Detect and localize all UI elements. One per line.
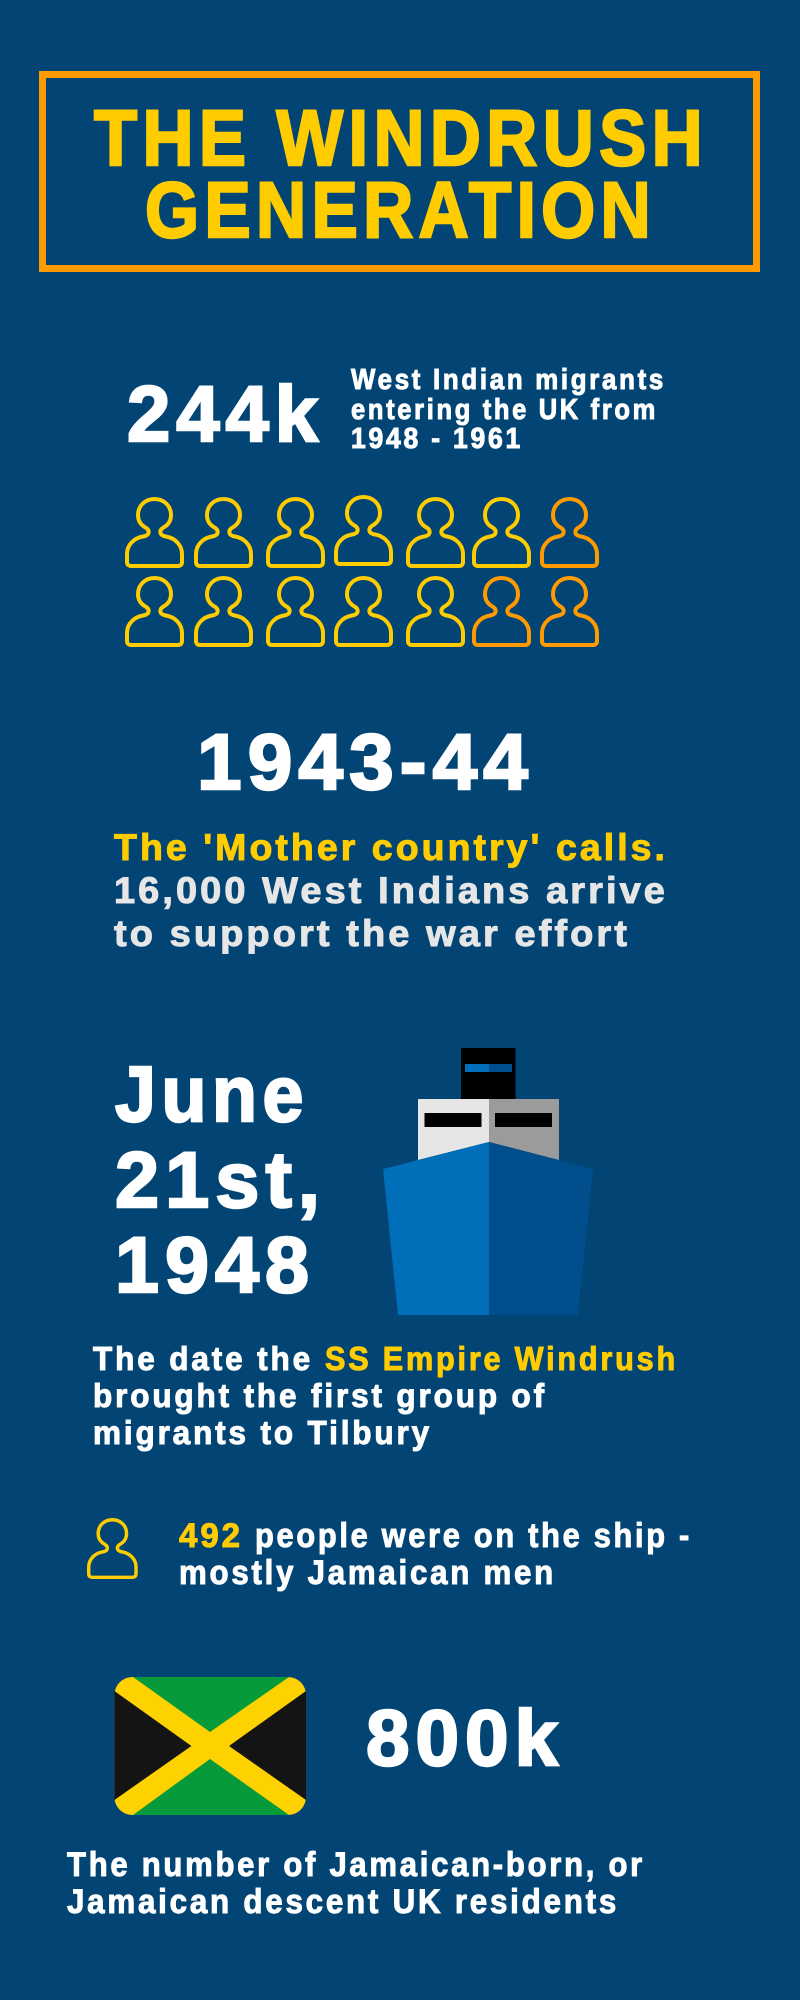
text block: SS Empire Windrush: brought the first group of [93, 1377, 547, 1414]
icon: Jamaican flag [114, 1677, 306, 1815]
description 244k [351, 364, 666, 455]
heading June 21st, 1948: 21st, [115, 1135, 326, 1224]
icons: people pictogram [127, 497, 597, 645]
text block: SS Empire Windrush: SS Empire Windrush [325, 1340, 678, 1377]
description 244k: West Indian migrants [351, 364, 666, 396]
text block: mother country: 16,000 West Indians arrive [114, 870, 668, 911]
text block: mother country: to support the war effort [114, 913, 630, 954]
text block: 492 people: mostly Jamaican men [179, 1554, 556, 1592]
text block: SS Empire Windrush [93, 1340, 678, 1451]
title border [42, 74, 756, 268]
number 800k: 800k [366, 1693, 564, 1782]
text block: mother country: The 'Mother country' calls. [114, 827, 668, 868]
text block: 492 people [179, 1517, 692, 1592]
heading 1943-44: 1943-44 [197, 717, 534, 806]
text block: mother country [114, 827, 668, 954]
description 244k: 1948 - 1961 [351, 423, 523, 455]
title panel [42, 74, 756, 268]
heading June 21st, 1948: 1948 [115, 1220, 315, 1309]
heading June 21st, 1948: June [115, 1049, 309, 1138]
text block: Jamaican residents: Jamaican descent UK residents [67, 1883, 619, 1921]
description 244k: entering the UK from [351, 394, 658, 426]
text block: Jamaican residents: The number of Jamaican-born, or [67, 1846, 645, 1884]
text block: SS Empire Windrush: The date the [93, 1340, 313, 1377]
text block: 492 people: 492 [179, 1517, 243, 1555]
title line 2: GENERATION [145, 165, 656, 254]
text block: Jamaican residents [67, 1846, 645, 1921]
title line 1: THE WINDRUSH [94, 93, 708, 182]
heading June 21st, 1948 [115, 1049, 326, 1309]
icon: ship [383, 1048, 593, 1315]
text block: 492 people: people were on the ship - [255, 1517, 692, 1555]
stat: 244k migrants [127, 364, 666, 458]
number 244k: 244k [127, 369, 324, 458]
text block: SS Empire Windrush: migrants to Tilbury [93, 1414, 432, 1451]
icon: single person [89, 1520, 136, 1577]
